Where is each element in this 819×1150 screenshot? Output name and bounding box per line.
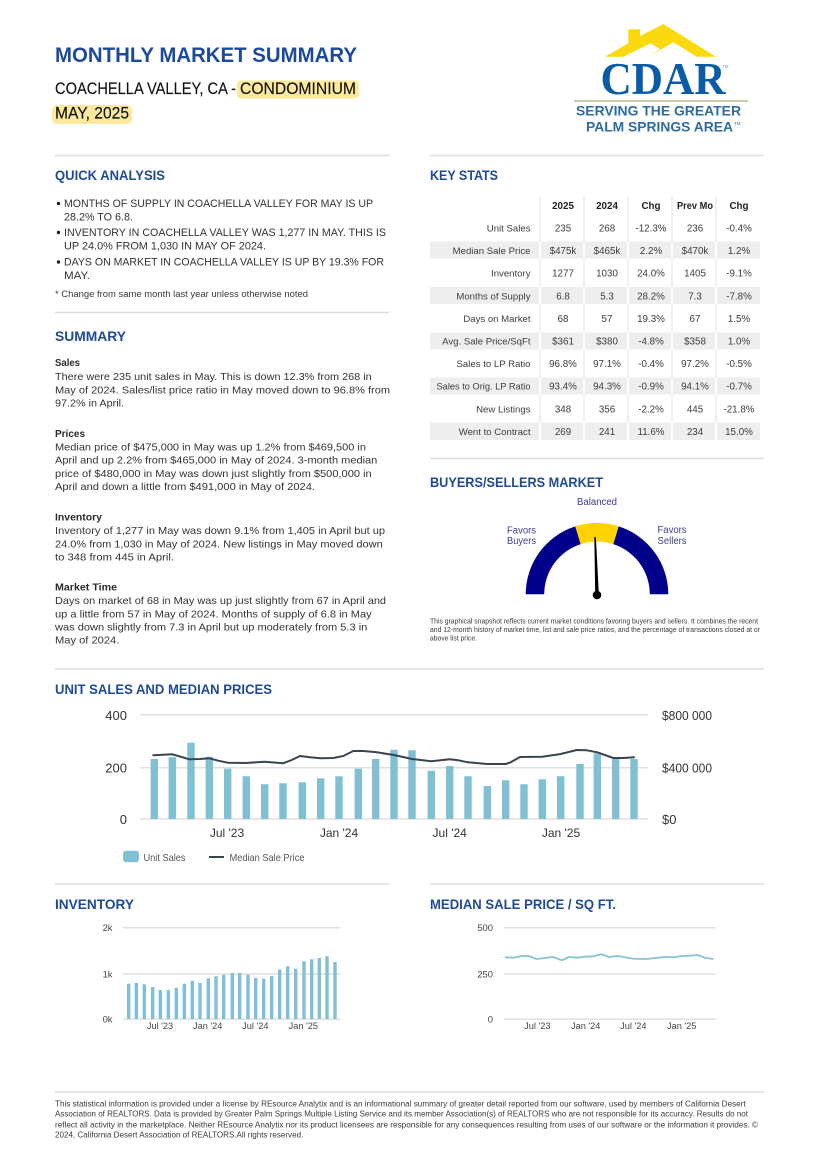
gauge: market balance: [507, 497, 686, 599]
subtitle: report date: MAY, 2025: [55, 104, 129, 122]
gauge: market balance: Buyers: [507, 536, 536, 547]
key stats table: 93.4%: [549, 382, 577, 393]
combo chart: unit sales and median prices: Jul '23: [210, 826, 244, 840]
summary: inventory: to 348 from 445 in April.: [55, 553, 174, 564]
summary: market time: was down slightly from 7.3 in April but up moderately from 5.3 in: [54, 622, 368, 633]
summary: prices: Prices: [55, 429, 85, 440]
combo chart: unit sales and median prices: $800 000: [662, 708, 712, 723]
summary: sales: 97.2% in April.: [55, 399, 124, 410]
key stats table: 1.5%: [728, 314, 750, 325]
summary: prices: price of $480,000 in May was down just slightly from $500,000 in: [55, 469, 372, 480]
footer disclaimer: Association of REALTORS. Data is provided by Greater Palm Springs Multiple Listing Service and its member Association(s) of REALTORS who are not responsible for its accuracy. Results do not: [55, 1109, 749, 1119]
combo chart: unit sales and median prices: 400: [105, 708, 127, 723]
key stats table: -7.8%: [726, 291, 752, 302]
key stats table: 1405: [684, 269, 706, 280]
key stats table: 1030: [596, 269, 618, 280]
key stats table: Unit Sales: [487, 224, 531, 234]
bar chart: inventory: 1k: [103, 968, 113, 980]
key stats table: -0.4%: [726, 224, 752, 234]
key stats table: Inventory: [491, 269, 531, 280]
key stats table: 28.2%: [637, 291, 665, 302]
gauge caption: This graphical snapshot reflects current market conditions favoring buyers and sellers. It combines the recent: [430, 618, 758, 626]
key stats table: 445: [687, 404, 704, 415]
logo: CDAR: CDAR: [600, 53, 726, 104]
summary: sales: Sales: [55, 358, 80, 369]
key stats table: 15.0%: [725, 427, 753, 438]
quick analysis bullet list: UP 24.0% FROM 1,030 IN MAY OF 2024.: [64, 240, 266, 252]
key stats table: Sales to LP Ratio: [457, 359, 530, 370]
bar chart: inventory: 2k: [103, 922, 113, 933]
chart legend: [123, 851, 305, 864]
logo: CDAR: TM: [734, 121, 741, 126]
combo chart: unit sales and median prices: $400 000: [662, 760, 712, 776]
key stats table: $475k: [550, 246, 576, 257]
key stats table: -9.1%: [726, 269, 752, 280]
key stats table: 94.3%: [593, 382, 621, 393]
line chart: median sale price per square foot: Jan '24: [571, 1021, 600, 1031]
key stats table: 6.8: [556, 291, 570, 302]
key stats table: 356: [599, 404, 616, 415]
key stats table: Sales to Orig. LP Ratio: [436, 382, 530, 393]
key stats table: $470k: [682, 246, 708, 257]
summary: market time: May of 2024.: [55, 636, 119, 647]
key stats table: 241: [599, 427, 615, 438]
key stats table: -0.4%: [638, 359, 664, 370]
key stats table: 268: [599, 224, 616, 234]
combo chart: unit sales and median prices: 200: [105, 760, 127, 776]
key stats table: -12.3%: [635, 224, 667, 234]
key stats table: $380: [596, 337, 618, 348]
gauge caption: [430, 618, 761, 642]
bar chart: inventory: [103, 922, 341, 1031]
line chart: median sale price per square foot: 0: [488, 1014, 493, 1024]
key stats table: -0.5%: [726, 359, 752, 370]
logo: CDAR: SERVING THE GREATER: [576, 102, 741, 118]
heading: quick analysis: QUICK ANALYSIS: [55, 167, 165, 183]
combo chart: unit sales and median prices: Jul '24: [433, 826, 467, 840]
key stats table: 2025: [552, 201, 574, 212]
bar chart: inventory: Jan '25: [289, 1021, 318, 1031]
key stats table: 94.1%: [681, 382, 709, 393]
summary: inventory: [55, 513, 385, 564]
combo chart: unit sales and median prices: Jan '25: [542, 826, 580, 840]
key stats table: 1277: [552, 269, 574, 280]
summary: inventory: Inventory: [55, 513, 102, 524]
summary: market time: Days on market of 68 in May was up just slightly from 67 in April and: [55, 596, 386, 607]
key stats table: $361: [552, 337, 574, 348]
bar chart: inventory: 0k: [103, 1014, 113, 1024]
footer disclaimer: 2024, California Desert Association of REALTORS.All rights reserved.: [55, 1129, 303, 1139]
summary: prices: [55, 429, 378, 493]
gauge caption: and 12-month history of market time, list and sale price ratios, and the percentage of transactions closed at or: [430, 627, 761, 634]
heading: key stats: KEY STATS: [430, 167, 498, 183]
key stats table: 234: [687, 427, 704, 438]
key stats table: 11.6%: [637, 427, 665, 438]
key stats table: 7.3: [688, 291, 702, 302]
key stats table: Prev Mo: [677, 201, 713, 212]
quick analysis bullet list: [57, 198, 386, 282]
key stats table: 97.2%: [681, 359, 709, 370]
key stats table: -0.7%: [726, 382, 752, 393]
key stats table: -2.2%: [638, 404, 664, 415]
gauge: market balance: Favors: [658, 525, 686, 536]
key stats table: 24.0%: [637, 269, 665, 280]
combo chart: unit sales and median prices: [105, 708, 712, 840]
summary: prices: Median price of $475,000 in May was up 1.2% from $469,500 in: [55, 442, 366, 453]
key stats table: 2.2%: [640, 246, 662, 257]
quick analysis bullet list: MAY.: [64, 270, 90, 282]
logo: CDAR: [574, 24, 748, 134]
key stats table: $358: [684, 337, 706, 348]
title: MONTHLY MARKET SUMMARY: [55, 44, 357, 67]
key stats table: Median Sale Price: [453, 246, 530, 257]
line chart: median sale price per square foot: 500: [477, 922, 493, 933]
quick analysis bullet list: DAYS ON MARKET IN COACHELLA VALLEY IS UP BY 19.3% FOR: [64, 257, 384, 269]
chart legend: Unit Sales: [144, 853, 186, 864]
line chart: median sale price per square foot: [477, 922, 716, 1031]
key stats table: 235: [555, 224, 572, 234]
gauge: market balance: Balanced: [577, 497, 617, 508]
summary: inventory: 24.0% from 1,030 in May of 2024. New listings in May moved down: [55, 539, 383, 550]
bar chart: inventory: Jul '23: [147, 1021, 173, 1031]
key stats table: 1.0%: [728, 337, 750, 348]
subtitle: location and property type: CONDOMINIUM: [240, 80, 356, 98]
summary: prices: April and down a little from $491,000 in May of 2024.: [55, 482, 315, 493]
summary: market time: Market Time: [55, 583, 117, 594]
key stats table: 269: [555, 427, 571, 438]
key stats table: -4.8%: [638, 337, 664, 348]
subtitle: location and property type: COACHELLA VALLEY, CA -: [55, 80, 236, 98]
gauge: market balance: Favors: [507, 526, 536, 536]
key stats table: [430, 196, 760, 440]
key stats table: Avg. Sale Price/SqFt: [442, 337, 531, 348]
heading: buyers/sellers market: BUYERS/SELLERS MARKET: [430, 474, 603, 490]
heading: inventory: INVENTORY: [55, 896, 135, 912]
line chart: median sale price per square foot: Jul '24: [620, 1021, 646, 1031]
footer disclaimer: This statistical information is provided under a license by REsource Analytix and is an informational summary of greater detail reported from our software, used by members of California Desert: [55, 1099, 746, 1109]
key stats table: 1.2%: [728, 246, 750, 257]
key stats table: 348: [555, 404, 572, 415]
gauge: market balance: Sellers: [658, 536, 686, 547]
quick analysis bullet list: INVENTORY IN COACHELLA VALLEY WAS 1,277 IN MAY. THIS IS: [64, 227, 386, 239]
chart legend: Median Sale Price: [230, 853, 305, 864]
bar chart: inventory: Jan '24: [193, 1021, 222, 1031]
line chart: median sale price per square foot: 250: [477, 968, 493, 980]
summary: inventory: Inventory of 1,277 in May was down 9.1% from 1,405 in April but up: [55, 526, 385, 537]
subtitle: location and property type: [55, 80, 359, 98]
summary: sales: [55, 358, 390, 410]
key stats table: 236: [687, 224, 704, 234]
footnote: * Change from same month last year unless otherwise noted: [55, 289, 308, 299]
key stats table: 2024: [596, 201, 618, 212]
summary: market time: [54, 583, 386, 647]
combo chart: unit sales and median prices: 0: [120, 812, 127, 827]
summary: sales: There were 235 unit sales in May. This is down 12.3% from 268 in: [55, 372, 372, 383]
quick analysis bullet list: 28.2% TO 6.8.: [64, 212, 133, 224]
summary: market time: up a little from 57 in May of 2024. Months of supply of 6.8 in May: [55, 609, 373, 620]
key stats table: Months of Supply: [456, 291, 531, 302]
key stats table: 19.3%: [637, 314, 665, 325]
key stats table: New Listings: [476, 404, 531, 415]
summary: sales: May of 2024. Sales/list price ratio in May moved down to 96.8% from: [55, 385, 390, 396]
logo: CDAR: TM: [722, 64, 729, 69]
combo chart: unit sales and median prices: $0: [662, 812, 676, 827]
key stats table: -21.8%: [723, 404, 755, 415]
footer disclaimer: reflect all activity in the marketplace. Neither REsource Analytix nor its product licensees are responsible for any consequences resulting from uses of our software or the information it provides. ©: [55, 1119, 759, 1129]
heading: summary: SUMMARY: [55, 328, 127, 344]
quick analysis bullet list: MONTHS OF SUPPLY IN COACHELLA VALLEY FOR MAY IS UP: [64, 198, 373, 210]
footer disclaimer: [55, 1099, 759, 1139]
key stats table: Went to Contract: [459, 427, 531, 438]
key stats table: -0.9%: [638, 382, 664, 393]
heading: median sale price per square foot: MEDIAN SALE PRICE / SQ FT.: [430, 896, 616, 912]
key stats table: 97.1%: [593, 359, 621, 370]
key stats table: 67: [690, 314, 700, 325]
summary: prices: April and up 2.2% from $465,000 in May of 2024. 3-month median: [55, 456, 378, 467]
logo: CDAR: PALM SPRINGS AREA: [586, 118, 733, 134]
key stats table: $465k: [594, 246, 620, 257]
key stats table: Days on Market: [463, 314, 531, 325]
bar chart: inventory: Jul '24: [242, 1021, 268, 1031]
key stats table: 57: [602, 314, 612, 325]
heading: unit sales and median prices: UNIT SALES AND MEDIAN PRICES: [55, 681, 272, 697]
key stats table: 5.3: [600, 291, 614, 302]
line chart: median sale price per square foot: Jul '23: [524, 1021, 550, 1031]
key stats table: 68: [558, 314, 569, 325]
line chart: median sale price per square foot: Jan '25: [667, 1021, 696, 1031]
gauge caption: above list price.: [430, 636, 477, 642]
combo chart: unit sales and median prices: Jan '24: [320, 826, 358, 840]
key stats table: 96.8%: [549, 359, 577, 370]
key stats table: Chg: [641, 201, 661, 212]
key stats table: Chg: [729, 201, 749, 212]
